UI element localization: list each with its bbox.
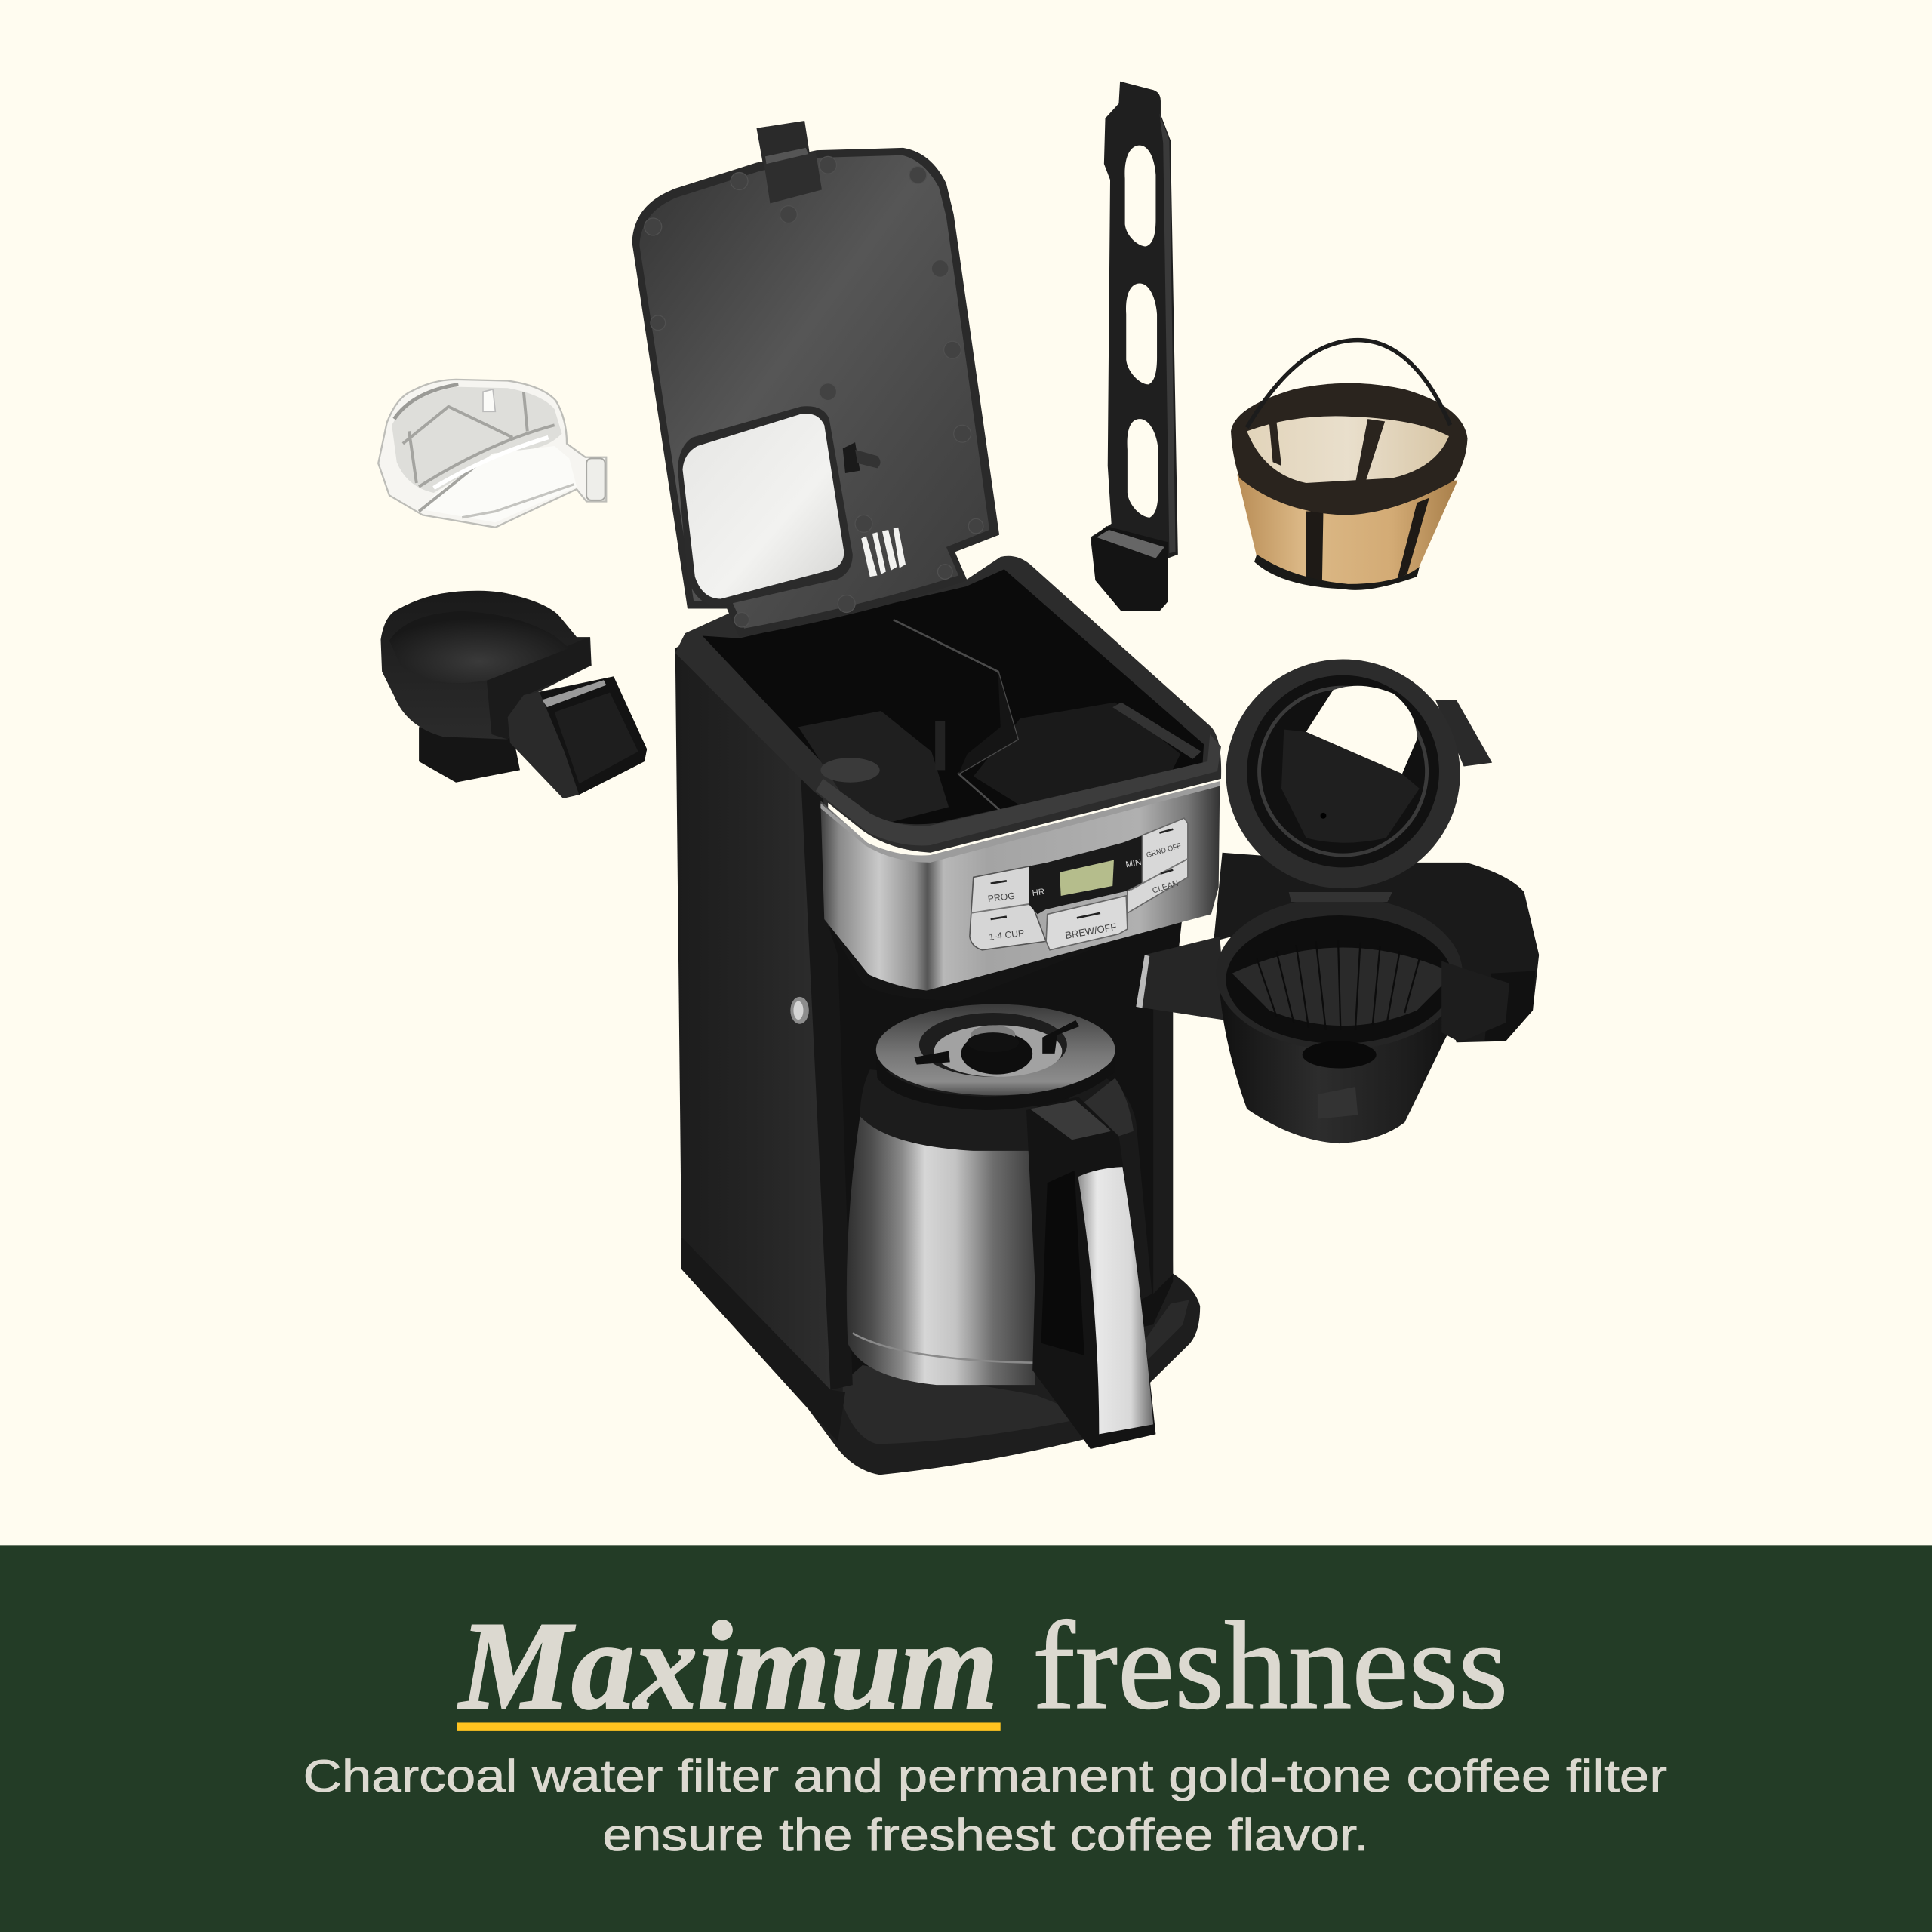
water filter holder <box>1091 82 1178 611</box>
lid vent slits <box>861 528 906 577</box>
lower shadow under head <box>832 931 1109 1001</box>
ring <box>1226 659 1460 888</box>
hopper floor right <box>974 703 1180 807</box>
label clean: CLEAN <box>1152 879 1180 896</box>
filter lower basket <box>1237 475 1457 589</box>
background <box>0 0 1932 1545</box>
clear basket lid <box>378 380 606 528</box>
hopper spout face <box>555 693 638 783</box>
left arm <box>1136 937 1226 1020</box>
cup rim <box>1216 897 1463 1050</box>
carafe steel body <box>847 1109 1035 1385</box>
carafe rear shoulder <box>1050 1075 1152 1331</box>
cup inner <box>1226 915 1453 1044</box>
carafe handle <box>1026 1097 1155 1449</box>
carafe knob <box>961 1025 1032 1075</box>
cup body <box>1220 992 1466 1143</box>
brew off button <box>1046 896 1128 950</box>
inner flap <box>1281 730 1420 843</box>
front column <box>801 777 853 1390</box>
carafe bottom ring <box>853 1334 1035 1363</box>
filter inner mesh <box>1247 416 1449 483</box>
lid outer rim <box>632 148 999 637</box>
ring hinge <box>1289 892 1392 902</box>
lid face <box>639 155 989 629</box>
hopper foot <box>419 727 520 783</box>
filter rim band <box>1231 383 1467 515</box>
lid lip <box>816 734 1221 845</box>
base step <box>681 1237 845 1441</box>
hopper rim <box>675 556 1221 853</box>
open lid <box>632 121 999 637</box>
label prog: PROG <box>987 891 1016 904</box>
gold-tone coffee filter <box>1231 340 1467 590</box>
lid pin <box>843 442 881 473</box>
hopper interior <box>703 569 1204 824</box>
coffee maker head: hopper and controls <box>675 556 1221 1001</box>
hopper neck <box>487 637 592 740</box>
hopper partition <box>894 620 1018 820</box>
lip highlight <box>820 781 1220 863</box>
recessed brew bay <box>828 912 1183 1392</box>
hopper cup <box>380 591 592 740</box>
right buttons <box>1128 818 1188 913</box>
latch block <box>1484 971 1535 1041</box>
filter window rim <box>678 406 853 606</box>
brew basket <box>1216 897 1509 1143</box>
hopper spout <box>508 676 647 798</box>
clear lid spout <box>586 458 605 500</box>
lid latch <box>756 121 822 203</box>
clear lid bright lower face <box>425 446 577 522</box>
bottom band <box>0 1545 1932 1932</box>
hopper bowl <box>389 611 569 683</box>
clear lid top plate <box>392 387 561 493</box>
lcd screen <box>1060 860 1114 896</box>
base top surface <box>843 1300 1189 1444</box>
display bezel <box>1029 835 1142 914</box>
lid divots <box>645 156 983 627</box>
cup front slot <box>1303 1041 1377 1069</box>
hopper seat <box>820 758 880 783</box>
subtitle line one: Charcoal water filter and permanent gold-tone coffee filter <box>303 1750 1667 1801</box>
clear lid ridges <box>403 392 555 512</box>
holder highlight <box>1159 113 1176 553</box>
lid tab <box>1435 700 1492 767</box>
carafe lever tabs <box>914 1020 1079 1065</box>
label grind off: GRND OFF <box>1146 842 1182 860</box>
side panel <box>675 641 830 1390</box>
carafe <box>847 1004 1155 1449</box>
brew basket ring lid <box>1226 659 1492 902</box>
back tray of brew basket <box>1136 853 1539 1042</box>
hopper stem <box>935 721 945 770</box>
base tray <box>681 1213 1200 1475</box>
title: Maximum <box>457 1597 998 1736</box>
title underline <box>457 1722 1001 1731</box>
side button <box>790 997 809 1024</box>
filter wire handle <box>1247 340 1451 428</box>
left buttons <box>970 866 1046 950</box>
carafe lid <box>876 1004 1115 1095</box>
title second word: freshness <box>1032 1597 1508 1736</box>
black hopper piece <box>380 591 647 798</box>
back column <box>1153 986 1173 1294</box>
label hr: HR <box>1032 888 1045 898</box>
hopper floor left <box>798 711 949 823</box>
label cup: 1-4 CUP <box>989 928 1025 943</box>
coffee maker body <box>675 641 1200 1475</box>
charcoal filter window <box>682 414 844 598</box>
carafe lid inner ring <box>919 1013 1067 1077</box>
carafe dark collar <box>860 1069 1038 1151</box>
cup front clip <box>1318 1087 1358 1118</box>
ring opening <box>1306 686 1417 774</box>
cup right arm <box>1441 961 1509 1042</box>
label brew off: BREW/OFF <box>1064 921 1118 941</box>
cup fins <box>1232 948 1454 1026</box>
holder foot <box>1092 526 1168 611</box>
label min: MIN <box>1125 858 1142 869</box>
filter basket ribs <box>1306 498 1429 584</box>
steel front band <box>820 783 1220 991</box>
subtitle line two: ensure the freshest coffee flavor. <box>602 1809 1369 1860</box>
